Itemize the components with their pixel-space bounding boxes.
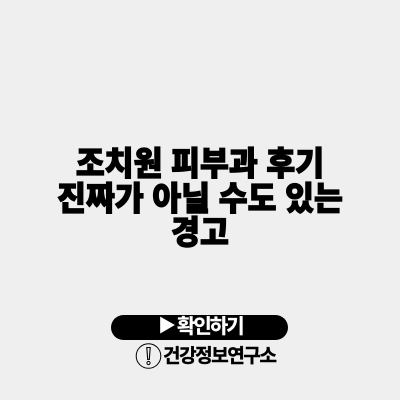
- button: confirm: [111, 315, 288, 340]
- title: 조치원 피부과 후기: [76, 145, 324, 182]
- title: 경고: [171, 214, 229, 251]
- icon: exclamation circle: [136, 343, 162, 369]
- title: 진짜가 아닐 수도 있는: [57, 180, 343, 216]
- brand logo: [136, 343, 276, 369]
- button label: 확인하기: [177, 316, 243, 338]
- icon: play triangle: ▶: [158, 316, 176, 336]
- title: [57, 145, 343, 251]
- brand name: 건강정보연구소: [163, 346, 276, 367]
